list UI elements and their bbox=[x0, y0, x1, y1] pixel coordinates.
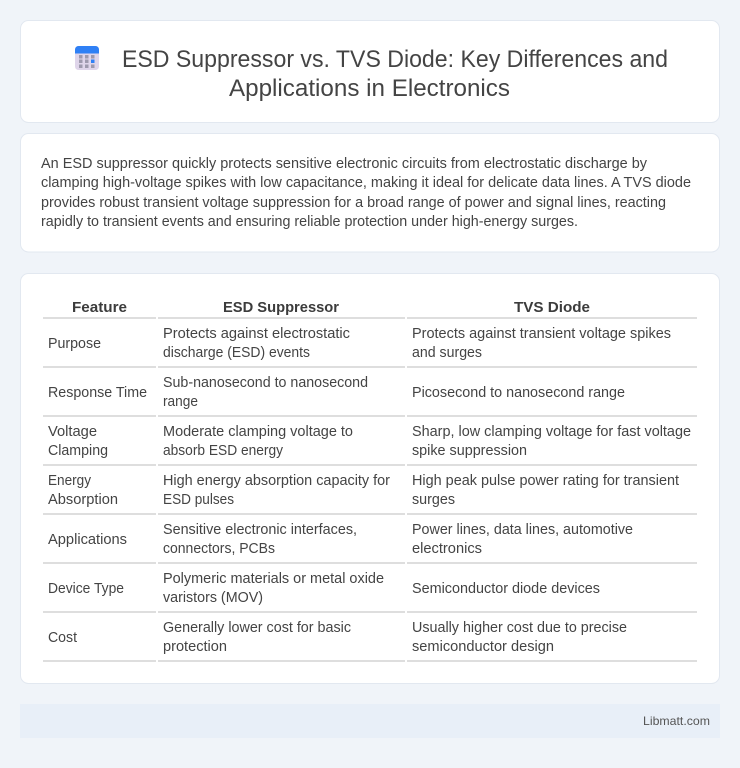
intro paragraph: rapidly to transient events and ensuring reliable protection under high-energy surges. bbox=[41, 214, 578, 230]
panel: header bbox=[20, 20, 720, 122]
row: purpose: Purpose bbox=[48, 336, 101, 352]
title: Applications in Electronics bbox=[229, 75, 510, 102]
row: cost: Cost bbox=[48, 630, 77, 646]
row: applications: Applications bbox=[48, 532, 127, 548]
row: purpose: and surges bbox=[412, 345, 482, 361]
row: energy absorption: High energy absorption capacity for bbox=[163, 473, 390, 489]
row: applications: connectors, PCBs bbox=[163, 541, 275, 557]
row: energy absorption bbox=[43, 473, 697, 515]
row: voltage clamping: Sharp, low clamping voltage for fast voltage bbox=[412, 424, 691, 440]
row: cost: Generally lower cost for basic bbox=[163, 620, 351, 636]
row: cost: Usually higher cost due to precise bbox=[412, 620, 627, 636]
panel: comparison table bbox=[20, 274, 720, 684]
intro paragraph bbox=[41, 156, 691, 230]
row: applications bbox=[43, 522, 697, 564]
table header row: Feature bbox=[72, 299, 127, 316]
row: applications: Power lines, data lines, automotive bbox=[412, 522, 633, 538]
row: energy absorption: ESD pulses bbox=[163, 492, 234, 508]
row: device type: varistors (MOV) bbox=[163, 590, 263, 606]
row: energy absorption: surges bbox=[412, 492, 455, 508]
row: response time bbox=[43, 375, 697, 417]
title bbox=[122, 46, 668, 102]
row: device type: Device Type bbox=[48, 581, 124, 597]
row: device type: Semiconductor diode devices bbox=[412, 581, 600, 597]
row: energy absorption: Absorption bbox=[48, 492, 118, 508]
row: purpose: Protects against transient voltage spikes bbox=[412, 326, 671, 342]
row: response time: Response Time bbox=[48, 385, 147, 401]
row: device type bbox=[43, 571, 697, 613]
row: purpose: discharge (ESD) events bbox=[163, 345, 310, 361]
icon: calendar bbox=[75, 46, 99, 70]
row: device type: Polymeric materials or metal oxide bbox=[163, 571, 384, 587]
table header row: ESD Suppressor bbox=[223, 299, 339, 316]
footer bbox=[20, 704, 720, 738]
row: cost: protection bbox=[163, 639, 227, 655]
row: voltage clamping: Clamping bbox=[48, 443, 108, 459]
row: applications: Sensitive electronic interfaces, bbox=[163, 522, 357, 538]
row: applications: electronics bbox=[412, 541, 482, 557]
row: energy absorption: High peak pulse power rating for transient bbox=[412, 473, 679, 489]
row: response time: range bbox=[163, 394, 198, 410]
row: response time: Sub-nanosecond to nanosecond bbox=[163, 375, 368, 391]
table header row: TVS Diode bbox=[514, 299, 590, 316]
row: cost: semiconductor design bbox=[412, 639, 554, 655]
row: voltage clamping: Voltage bbox=[48, 424, 97, 440]
table header row bbox=[43, 299, 697, 319]
row: cost bbox=[43, 620, 697, 662]
row: purpose bbox=[43, 326, 697, 368]
panel: introduction bbox=[20, 134, 720, 252]
row: voltage clamping: absorb ESD energy bbox=[163, 443, 284, 459]
footer: Libmatt.com bbox=[643, 714, 710, 728]
intro paragraph: clamping high-voltage spikes with low capacitance, making it ideal for delicate data lines. A TVS diode bbox=[41, 175, 691, 191]
row: voltage clamping bbox=[43, 424, 697, 466]
intro paragraph: provides robust transient voltage suppression for a broad range of power and signal lines, reacting bbox=[41, 195, 666, 211]
row: response time: Picosecond to nanosecond range bbox=[412, 385, 625, 401]
row: purpose: Protects against electrostatic bbox=[163, 326, 350, 342]
intro paragraph: An ESD suppressor quickly protects sensitive electronic circuits from electrostatic discharge by bbox=[41, 156, 648, 172]
row: voltage clamping: spike suppression bbox=[412, 443, 527, 459]
title: ESD Suppressor vs. TVS Diode: Key Differences and bbox=[122, 46, 668, 73]
row: voltage clamping: Moderate clamping voltage to bbox=[163, 424, 353, 440]
row: energy absorption: Energy bbox=[48, 473, 92, 489]
